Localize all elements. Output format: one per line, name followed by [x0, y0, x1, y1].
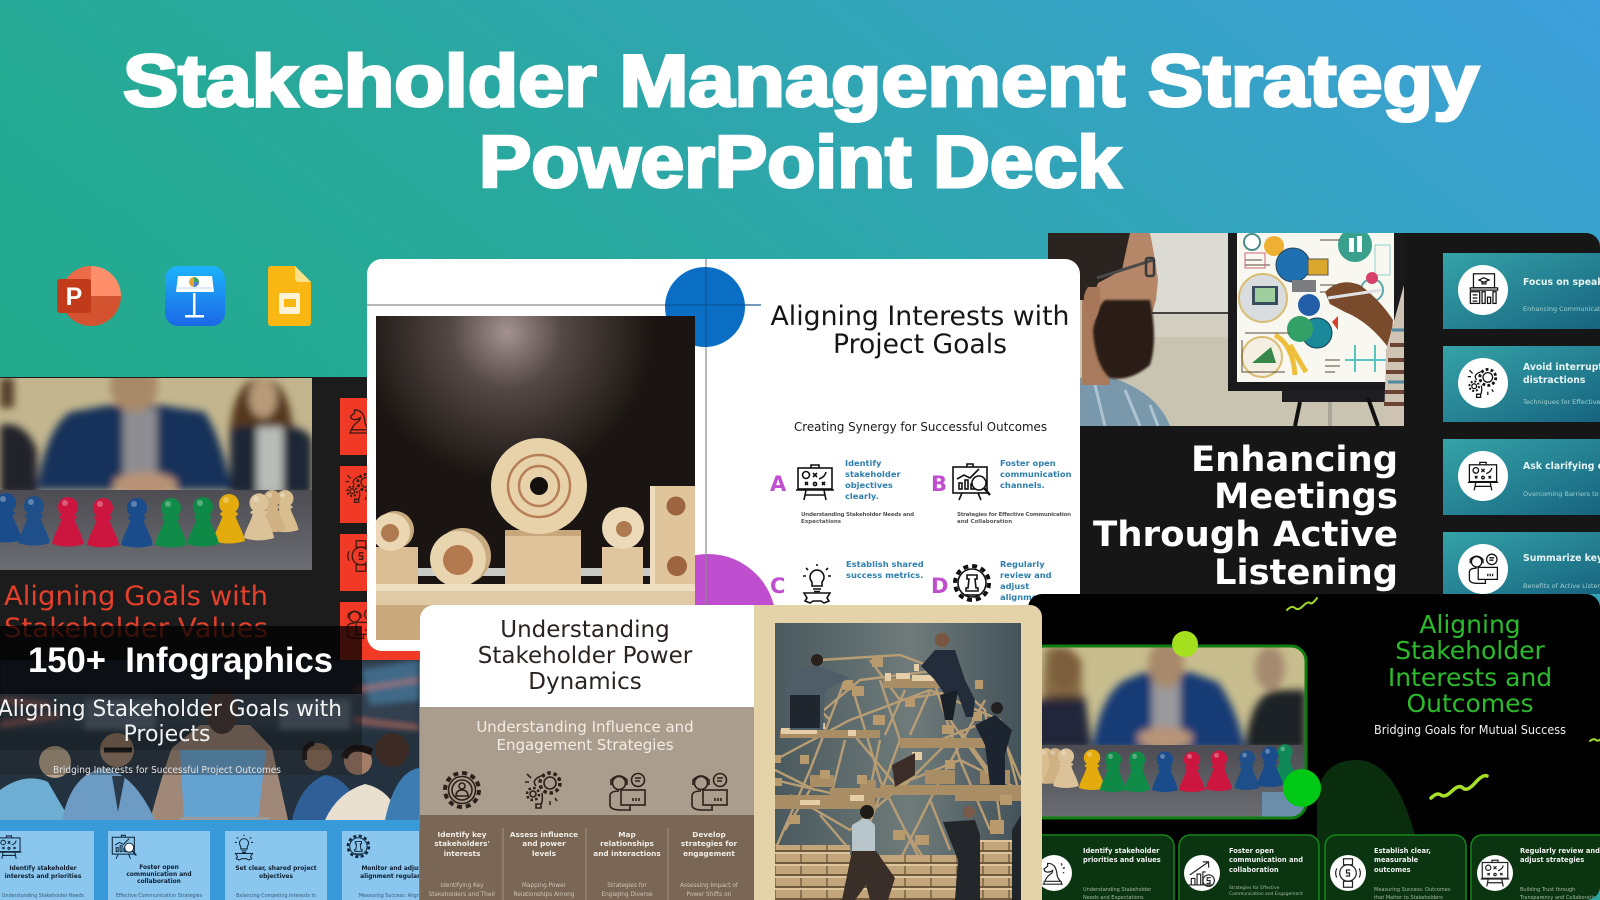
card: communication	[1179, 835, 1319, 900]
card: identify: Identify stakeholder	[9, 866, 77, 872]
card: foster: Foster open	[139, 865, 179, 871]
red icon tiles	[340, 398, 420, 662]
squiggles	[1287, 598, 1600, 798]
card: foster: collaboration	[137, 879, 181, 885]
card: Focus on speaker	[1443, 253, 1600, 329]
item B: Strategies for Effective Communication	[957, 512, 1071, 518]
builders	[785, 633, 1021, 900]
card: priorities	[1030, 835, 1174, 900]
photo: builders on wooden scaffold	[775, 623, 1021, 900]
purple circle	[695, 554, 774, 605]
card: monitor: Monitor and adjust	[361, 866, 425, 872]
app icons	[57, 266, 311, 326]
icon: PowerPoint	[57, 266, 121, 326]
column: develop: engagement	[683, 849, 735, 858]
column: identify	[428, 830, 496, 898]
panel: slide Aligning Stakeholder Interests and Outcomes	[1028, 594, 1600, 900]
card: Avoid interruptions	[1443, 346, 1600, 422]
heading: Enhancing Meetings Through Active Listening: Through Active	[1093, 515, 1398, 555]
blue circle	[665, 267, 745, 347]
heading: Aligning Stakeholder Interests and Outcomes	[1390, 614, 1550, 712]
banner: 150+ Infographics: 150+ Infographics	[28, 641, 333, 680]
item B	[931, 458, 1072, 525]
column: assess: and power	[522, 839, 566, 848]
card: communication: communication and	[1229, 856, 1303, 864]
column: develop: Develop	[692, 830, 726, 839]
icon: Keynote	[165, 266, 225, 326]
title: PowerPoint Deck	[479, 122, 1121, 203]
stand	[1282, 391, 1387, 402]
whiteboard	[1228, 226, 1404, 391]
heading: Aligning Goals with Stakeholder Values: Stakeholder Values	[4, 613, 268, 644]
card: Avoid interruptions: distractions	[1523, 375, 1586, 386]
heading: Aligning Interests with Project Goals: Project Goals	[833, 329, 1007, 360]
column: identify: Identifying Key	[440, 883, 484, 889]
title: Stakeholder Management Strategy	[123, 41, 1479, 122]
item B: and Collaboration	[957, 519, 1012, 525]
card: foster: Effective Communication Strategies	[116, 893, 203, 899]
heading: Enhancing Meetings Through Active Listening: Enhancing	[1191, 440, 1398, 480]
heading: Enhancing Meetings Through Active Listening: Meetings	[1214, 477, 1398, 517]
item A: Understanding Stakeholder Needs and	[801, 512, 914, 518]
heading: Understanding Stakeholder Power Dynamics: Stakeholder Power	[478, 643, 693, 669]
builder center	[892, 753, 915, 787]
icon: PowerPoint: P	[66, 283, 82, 311]
column: develop: Assessing Impact of	[680, 883, 739, 889]
heading: Aligning Goals with Stakeholder Values	[4, 584, 267, 638]
column: assess: levels	[532, 849, 556, 858]
item C: Establish shared	[846, 559, 924, 569]
subtitle: Creating Synergy: Creating Synergy for Successful Outcomes	[794, 419, 1047, 434]
subtitle: Bridging Goals: Bridging Goals for Mutual Success	[1374, 723, 1566, 737]
heading: Enhancing Meetings Through Active Listening	[1093, 440, 1398, 593]
heading: Aligning Interests with Project Goals	[770, 301, 1070, 360]
arm and hand	[1325, 282, 1393, 350]
card: Ask clarifying questions	[1443, 439, 1600, 515]
heading: Aligning Stakeholder Goals with Projects	[0, 696, 342, 747]
card: communication: Strategies for Effective	[1229, 885, 1280, 891]
panel: slide Aligning Goals with Stakeholder Values	[0, 360, 420, 662]
item C: C	[770, 574, 785, 598]
column: develop: strategies for	[681, 839, 737, 848]
photo: people and pawns	[0, 360, 312, 570]
card: identify: Understanding Stakeholder Needs	[2, 893, 85, 899]
icons row	[445, 773, 727, 810]
column: assess	[510, 830, 578, 898]
blue strip	[0, 820, 419, 900]
builder bottom right	[943, 806, 1021, 900]
column: map	[593, 830, 661, 898]
item D: alignment.	[1000, 592, 1050, 602]
subtitle: Understanding Influence: Understanding Influence and	[476, 718, 694, 736]
builder bottom left	[842, 805, 895, 900]
card: review	[1471, 835, 1600, 900]
item C	[770, 559, 924, 603]
item A: A	[770, 472, 787, 496]
card: foster: communication and	[126, 872, 192, 878]
title	[123, 41, 1479, 203]
photo: pawns	[1030, 640, 1306, 818]
translucent title bands	[0, 694, 362, 750]
card: outcomes: outcomes	[1374, 866, 1411, 874]
card: communication: Foster open	[1229, 847, 1274, 855]
photo: man at whiteboard	[1048, 226, 1404, 426]
card: Ask clarifying questions: Overcoming Barriers to	[1523, 490, 1599, 498]
heading: Aligning Stakeholder Interests and Outcomes: Interests and	[1388, 663, 1552, 692]
column: identify: interests	[444, 849, 480, 858]
builder right	[975, 702, 1012, 785]
heading: Aligning Stakeholder Interests and Outcomes: Outcomes	[1406, 689, 1534, 718]
panel: slide Aligning Interests with Project Goals	[367, 259, 1080, 690]
column: map: Engaging Diverse	[601, 892, 653, 898]
item D: adjust	[1000, 581, 1029, 591]
card: review: Building Trust through	[1520, 887, 1575, 893]
green circle	[1283, 769, 1321, 807]
heading: Enhancing Meetings Through Active Listening: Listening	[1214, 553, 1398, 593]
heading: Aligning Stakeholder Goals with Projects: Projects	[124, 721, 210, 747]
panel: slide Aligning Stakeholder Goals with Projects	[0, 660, 427, 900]
card: monitor: alignment regularly	[360, 874, 426, 880]
card: foster	[108, 831, 210, 900]
item A: Expectations	[801, 519, 842, 525]
column: develop: Power Shifts on	[687, 892, 732, 898]
panel: slide Enhancing Meetings	[1048, 226, 1600, 594]
card: communication: Communication and Engagement	[1229, 891, 1303, 897]
heading: Aligning Interests with Project Goals: Aligning Interests with	[770, 301, 1070, 332]
icon: Google Slides	[268, 266, 311, 326]
item D	[931, 559, 1052, 602]
card: priorities: priorities and values	[1083, 856, 1161, 864]
heading: Aligning Stakeholder Interests and Outcomes: Stakeholder	[1395, 636, 1546, 665]
platforms and blocks	[775, 678, 1021, 809]
card: shared objectives: objectives	[259, 874, 293, 880]
card: outcomes: Measuring Success: Outcomes	[1374, 887, 1451, 893]
heading: Aligning Stakeholder Interests and Outcomes: Aligning	[1419, 610, 1521, 639]
heading: Aligning Stakeholder Goals with Projects: Aligning Stakeholder Goals with	[0, 696, 342, 722]
subtitle: Understanding Influence: Engagement Strategies	[496, 736, 674, 754]
item D: D	[931, 574, 948, 598]
brick piles	[775, 840, 1021, 900]
center woman	[150, 725, 288, 820]
card: priorities: Understanding Stakeholder	[1083, 887, 1152, 893]
item A: objectives	[845, 480, 893, 490]
photo: wooden shapes	[372, 316, 695, 640]
card: review: adjust strategies	[1520, 856, 1584, 864]
card: shared objectives	[225, 831, 327, 900]
builder top left	[785, 654, 850, 730]
card: identify	[0, 831, 94, 900]
lime circle	[1172, 631, 1198, 657]
card: shared objectives: Set clear, shared project	[235, 866, 317, 872]
subtitle: Bridging Interests: Bridging Interests for Successful Project Outcomes	[53, 765, 281, 776]
item B: channels.	[1000, 480, 1045, 490]
column: assess: Mapping Power	[522, 883, 567, 889]
column: develop	[680, 830, 739, 898]
column: map: and interactions	[593, 849, 661, 858]
item C: success metrics.	[846, 570, 923, 580]
subtitle: Understanding Influence	[476, 718, 694, 754]
card: Avoid interruptions: Techniques for Effective	[1522, 398, 1600, 406]
card: communication: collaboration	[1229, 866, 1279, 874]
dark green blob	[1317, 760, 1421, 900]
column: assess: Assess influence	[510, 830, 578, 839]
heading: Understanding Stakeholder Power Dynamics	[478, 617, 693, 695]
item A: clearly.	[845, 491, 879, 501]
item B: Foster open	[1000, 458, 1056, 468]
card: Summarize key points	[1443, 532, 1600, 594]
card: outcomes: Establish clear,	[1374, 847, 1431, 855]
column: identify: Stakeholders and Their	[428, 892, 496, 898]
card: shared objectives: Balancing Competing Interests in	[236, 893, 316, 899]
column: assess: Relationships Among	[514, 892, 575, 898]
right people	[292, 775, 350, 820]
panel: slide Understanding Stakeholder Power Dynamics	[420, 605, 1042, 900]
builder top right	[921, 633, 975, 720]
card: review: Regularly review and	[1520, 847, 1600, 855]
card: identify: interests and priorities	[5, 874, 82, 880]
item A	[770, 458, 914, 525]
item B: B	[931, 472, 947, 496]
card: outcomes: measurable	[1374, 856, 1419, 864]
heading: Understanding Stakeholder Power Dynamics: Understanding	[500, 617, 670, 643]
card: priorities: Identify stakeholder	[1083, 847, 1160, 855]
column: identify: stakeholders'	[434, 839, 490, 848]
card: monitor: Measuring Success: Aligning	[359, 893, 427, 899]
card: outcomes	[1325, 835, 1466, 900]
item A: stakeholder	[845, 469, 901, 479]
man	[1048, 233, 1170, 426]
photo: team at table	[0, 660, 419, 820]
column: map: Strategies for	[607, 883, 647, 889]
item D: Regularly	[1000, 559, 1045, 569]
column: map: relationships	[600, 839, 654, 848]
card: monitor	[342, 831, 427, 900]
item B: communication	[1000, 469, 1072, 479]
item D: review and	[1000, 570, 1052, 580]
struts	[775, 655, 1021, 860]
heading: Aligning Goals with Stakeholder Values: Aligning Goals with	[4, 581, 268, 612]
column: identify: Identify key	[438, 830, 487, 839]
column: map: Map	[618, 830, 636, 839]
banner: 150+ Infographics	[0, 626, 362, 694]
heading: Understanding Stakeholder Power Dynamics: Dynamics	[528, 669, 642, 695]
item A: Identify	[845, 458, 882, 468]
left people	[0, 778, 70, 820]
